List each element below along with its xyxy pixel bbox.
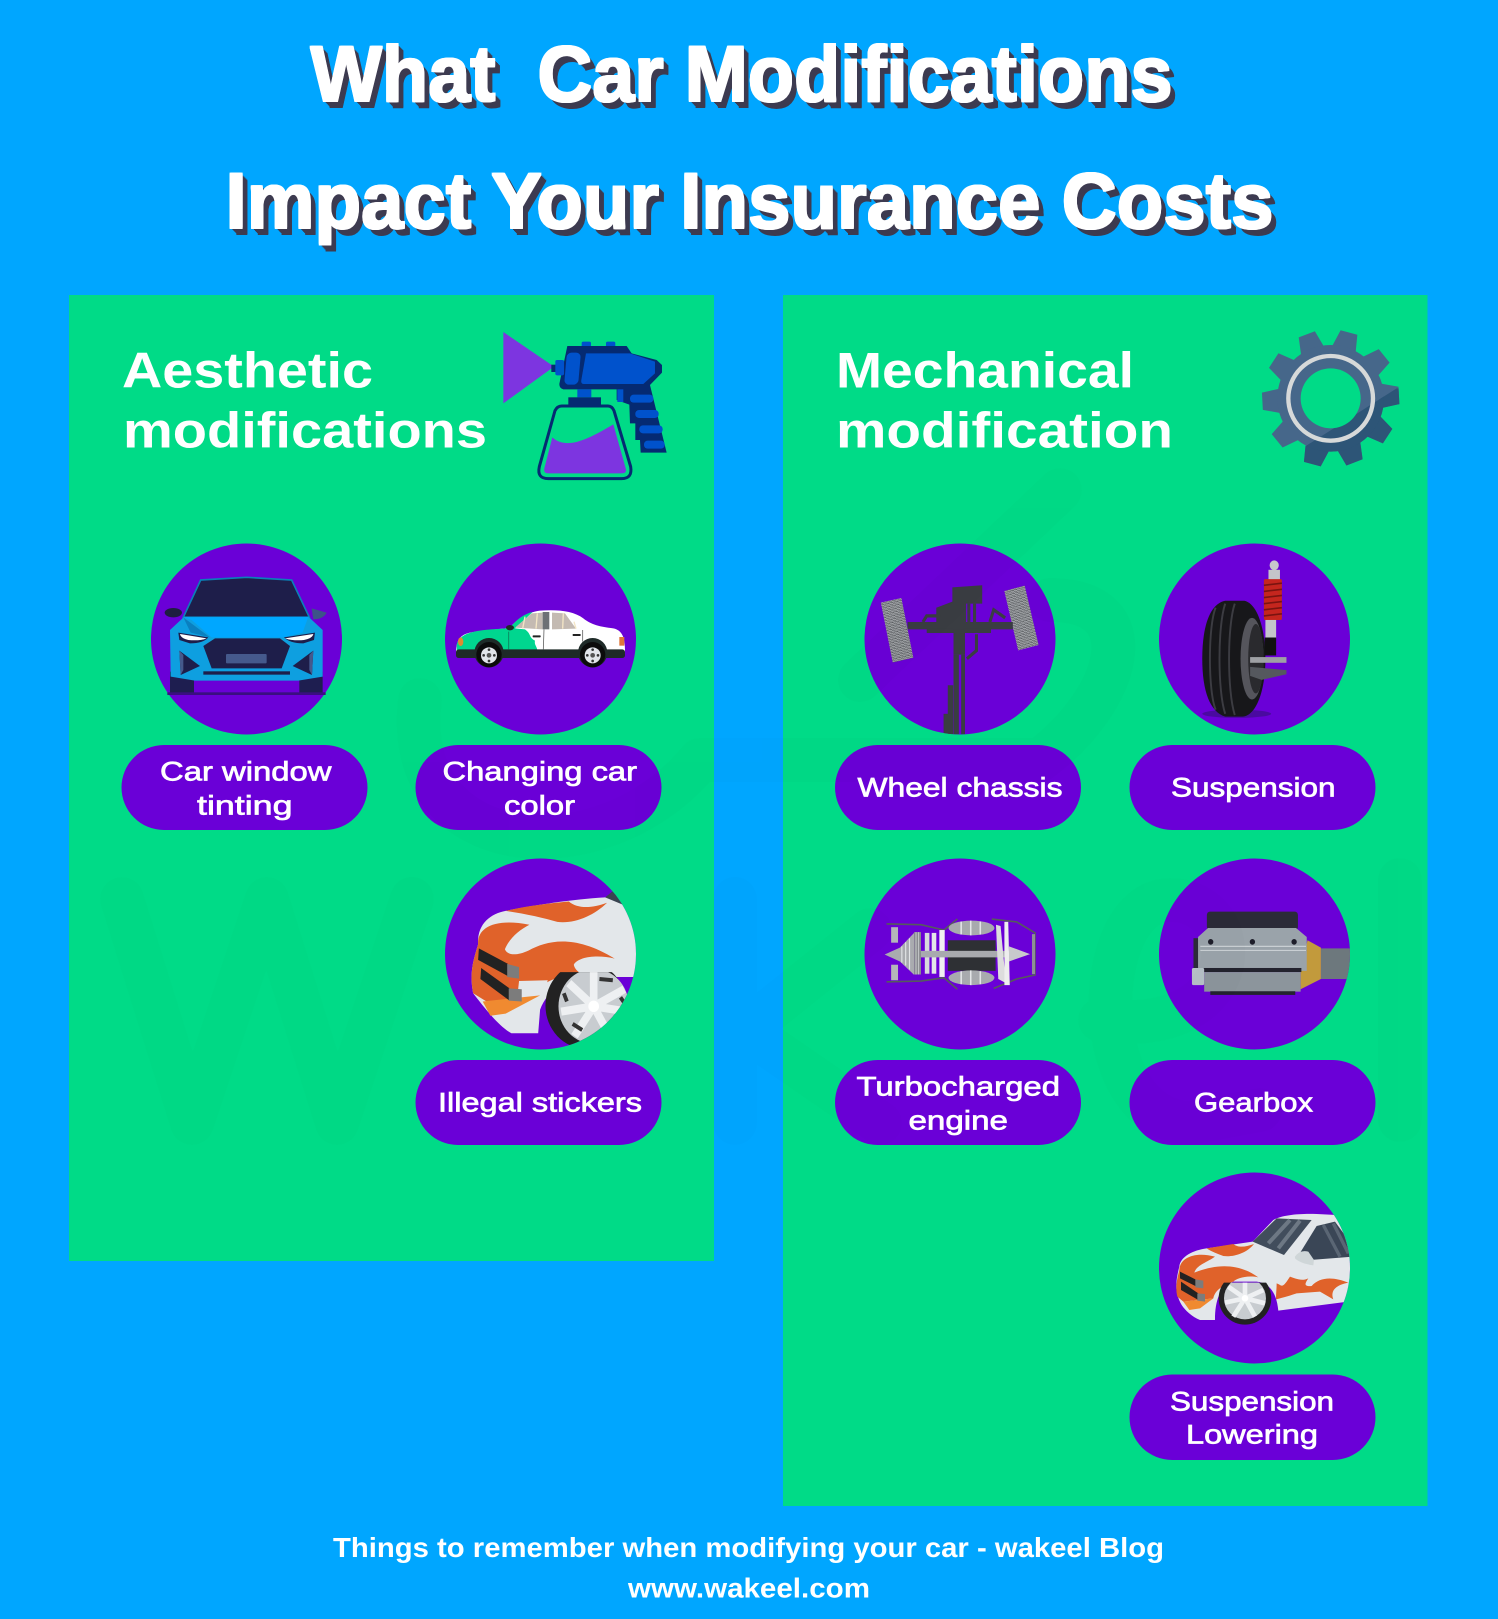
pill label [1130, 1374, 1376, 1460]
pill label: engine [908, 1106, 1008, 1136]
pill label: color [504, 790, 575, 820]
card: suspension [1130, 544, 1376, 830]
title: What Car Modifications [310, 29, 1172, 118]
panel: mechanical modification [783, 295, 1428, 1506]
heading: mechanical modification: Mechanical [836, 342, 1134, 398]
heading: mechanical modification [836, 342, 1173, 458]
circle with lowered flame-decal car [1159, 1172, 1353, 1364]
pill label: Turbocharged [856, 1072, 1060, 1102]
icon: gear [1262, 329, 1400, 468]
circle with flame-decal car close-up [445, 858, 640, 1050]
pill label [1130, 1060, 1376, 1145]
card: illegal stickers [416, 858, 662, 1145]
pill label: Wheel chassis [858, 772, 1062, 802]
footer text [333, 1532, 1164, 1604]
circle with chassis icon [864, 544, 1056, 734]
heading: aesthetic modifications [122, 342, 487, 458]
pill label [1130, 745, 1376, 830]
pill label: Suspension [1170, 1386, 1334, 1416]
circle with wheel and shock absorber [1159, 544, 1350, 734]
pill label: Lowering [1186, 1420, 1318, 1450]
pill label: Illegal stickers [438, 1088, 642, 1118]
card: suspension lowering [1130, 1172, 1376, 1460]
circle with two-tone side-view car [445, 544, 636, 734]
pill label [122, 745, 368, 830]
pill label: Changing car [442, 756, 637, 786]
pill label: Gearbox [1194, 1088, 1314, 1118]
footer text: www.wakeel.com [627, 1572, 870, 1604]
watermark [122, 490, 1400, 1123]
pill label: Suspension [1171, 772, 1336, 802]
heading: aesthetic modifications: modifications [123, 402, 487, 458]
card: car window tinting [122, 544, 368, 830]
footer text: Things to remember when modifying your car - wakeel Blog [333, 1532, 1164, 1563]
pill label: tinting [197, 790, 292, 820]
circle with front-view car [151, 544, 342, 734]
circle with gearbox illustration [1159, 858, 1352, 1050]
pill label [416, 745, 662, 830]
heading: aesthetic modifications: Aesthetic [122, 342, 373, 398]
card: turbocharged engine [835, 858, 1081, 1145]
circle with turbine cutaway [864, 858, 1056, 1050]
card: gearbox [1130, 858, 1376, 1145]
panel: aesthetic modifications [69, 295, 714, 1261]
pill label [835, 745, 1081, 830]
title: Impact Your Insurance Costs [226, 156, 1274, 245]
pill label [416, 1060, 662, 1145]
card: changing car color [416, 544, 662, 830]
title [226, 29, 1274, 245]
pill label [835, 1060, 1081, 1145]
card: wheel chassis [835, 544, 1081, 830]
icon: spray gun [503, 332, 667, 479]
pill label: Car window [160, 756, 332, 786]
heading: mechanical modification: modification [836, 402, 1173, 458]
